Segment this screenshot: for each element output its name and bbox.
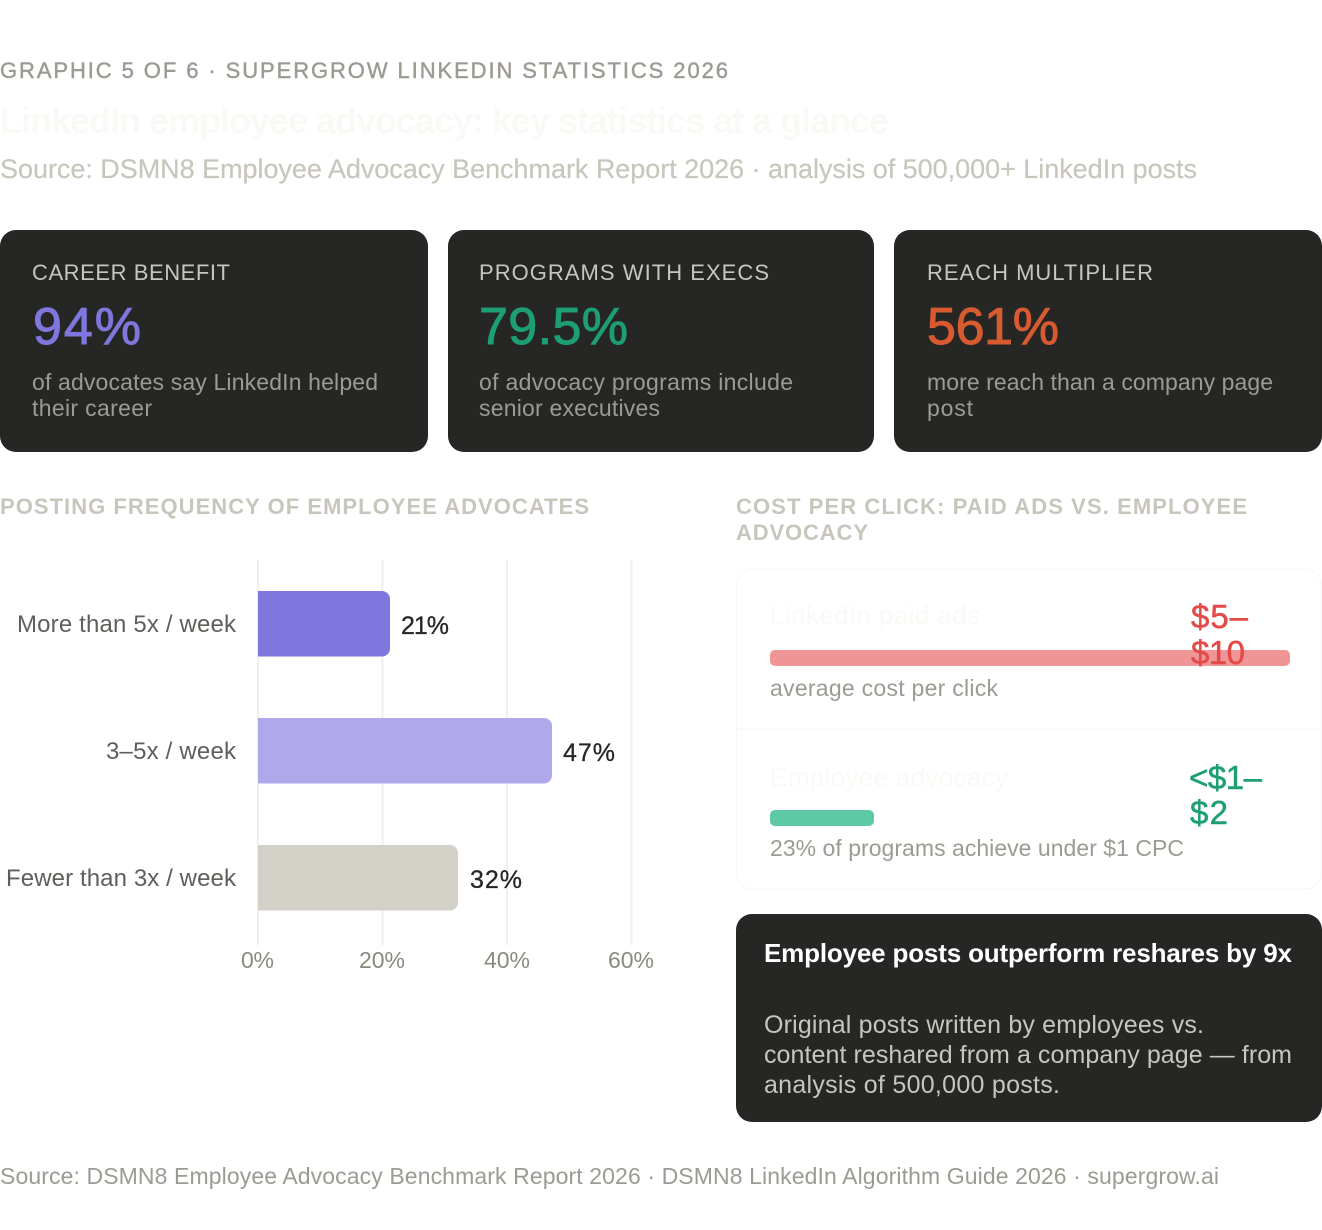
- card description: more reach than a company page: [927, 369, 1273, 395]
- footer source: Source: DSMN8 Employee Advocacy Benchmark Report 2026 · DSMN8 LinkedIn Algorithm Guide 2026 · supergrow.ai: [0, 1163, 1219, 1189]
- section heading: cost per click: ADVOCACY: [736, 520, 868, 545]
- row: Employee advocacy: 23% of programs achieve under $1 CPC: [770, 835, 1184, 861]
- bar chart: posting frequency: [6, 560, 654, 973]
- stat card: programs with execs: [448, 230, 874, 452]
- row: LinkedIn paid ads: [770, 598, 1290, 701]
- card label: CAREER BENEFIT: [32, 260, 230, 285]
- callout heading: Employee posts outperform reshares by 9x: [764, 938, 1293, 968]
- card value: 561%: [927, 298, 1059, 356]
- row: LinkedIn paid ads: $5–: [1191, 598, 1249, 635]
- stat card: career benefit: [0, 230, 428, 452]
- section heading: cost per click: COST PER CLICK: PAID ADS VS. EMPLOYEE: [736, 494, 1247, 519]
- card label: PROGRAMS WITH EXECS: [479, 260, 769, 285]
- callout: employee posts outperform: [736, 914, 1322, 1122]
- callout body: analysis of 500,000 posts.: [764, 1071, 1060, 1099]
- callout body: Original posts written by employees vs.: [764, 1011, 1204, 1039]
- bar: 3 to 5x: 3–5x / week: [106, 738, 237, 765]
- eyebrow: GRAPHIC 5 OF 6 · SUPERGROW LINKEDIN STATISTICS 2026: [0, 58, 728, 83]
- subtitle: Source: DSMN8 Employee Advocacy Benchmark Report 2026 · analysis of 500,000+ LinkedIn posts: [0, 154, 1197, 184]
- card description: post: [927, 395, 974, 421]
- row: Employee advocacy: Employee advocacy: [770, 762, 1008, 792]
- card description: of advocacy programs include: [479, 369, 793, 395]
- row: LinkedIn paid ads: $10: [1191, 634, 1245, 671]
- bar: fewer than 3x: 32%: [470, 866, 522, 894]
- card description: their career: [32, 395, 152, 421]
- bar: 3 to 5x: 47%: [563, 739, 615, 767]
- card description: senior executives: [479, 395, 660, 421]
- bar: 3 to 5x: [106, 718, 615, 784]
- stat card: reach multiplier: [894, 230, 1322, 452]
- bar: more than 5x: More than 5x / week: [17, 611, 237, 638]
- section heading: posting frequency: POSTING FREQUENCY OF EMPLOYEE ADVOCATES: [0, 494, 589, 519]
- bar: fewer than 3x: [6, 845, 522, 910]
- x axis labels: 20%: [359, 947, 405, 973]
- row: Employee advocacy: <$1–: [1189, 759, 1263, 796]
- card label: REACH MULTIPLIER: [927, 260, 1153, 285]
- title: LinkedIn employee advocacy: key statistics at a glance: [0, 100, 889, 141]
- bar: fewer than 3x: Fewer than 3x / week: [6, 865, 237, 892]
- x axis labels: 0%: [241, 947, 274, 973]
- row: Employee advocacy: [770, 759, 1263, 861]
- card description: of advocates say LinkedIn helped: [32, 369, 378, 395]
- card value: 94%: [33, 298, 141, 356]
- card value: 79.5%: [479, 298, 628, 356]
- header: [0, 58, 1197, 184]
- panel: cost comparison: [736, 569, 1322, 889]
- x axis labels: 40%: [484, 947, 530, 973]
- row: Employee advocacy: $2: [1190, 794, 1228, 831]
- x axis labels: [241, 947, 654, 973]
- row: LinkedIn paid ads: LinkedIn paid ads: [770, 600, 980, 630]
- x axis labels: 60%: [608, 947, 654, 973]
- callout body: content reshared from a company page — from: [764, 1041, 1292, 1069]
- bar: more than 5x: 21%: [401, 612, 449, 640]
- row: LinkedIn paid ads: average cost per click: [770, 675, 998, 701]
- bar: more than 5x: [17, 591, 449, 656]
